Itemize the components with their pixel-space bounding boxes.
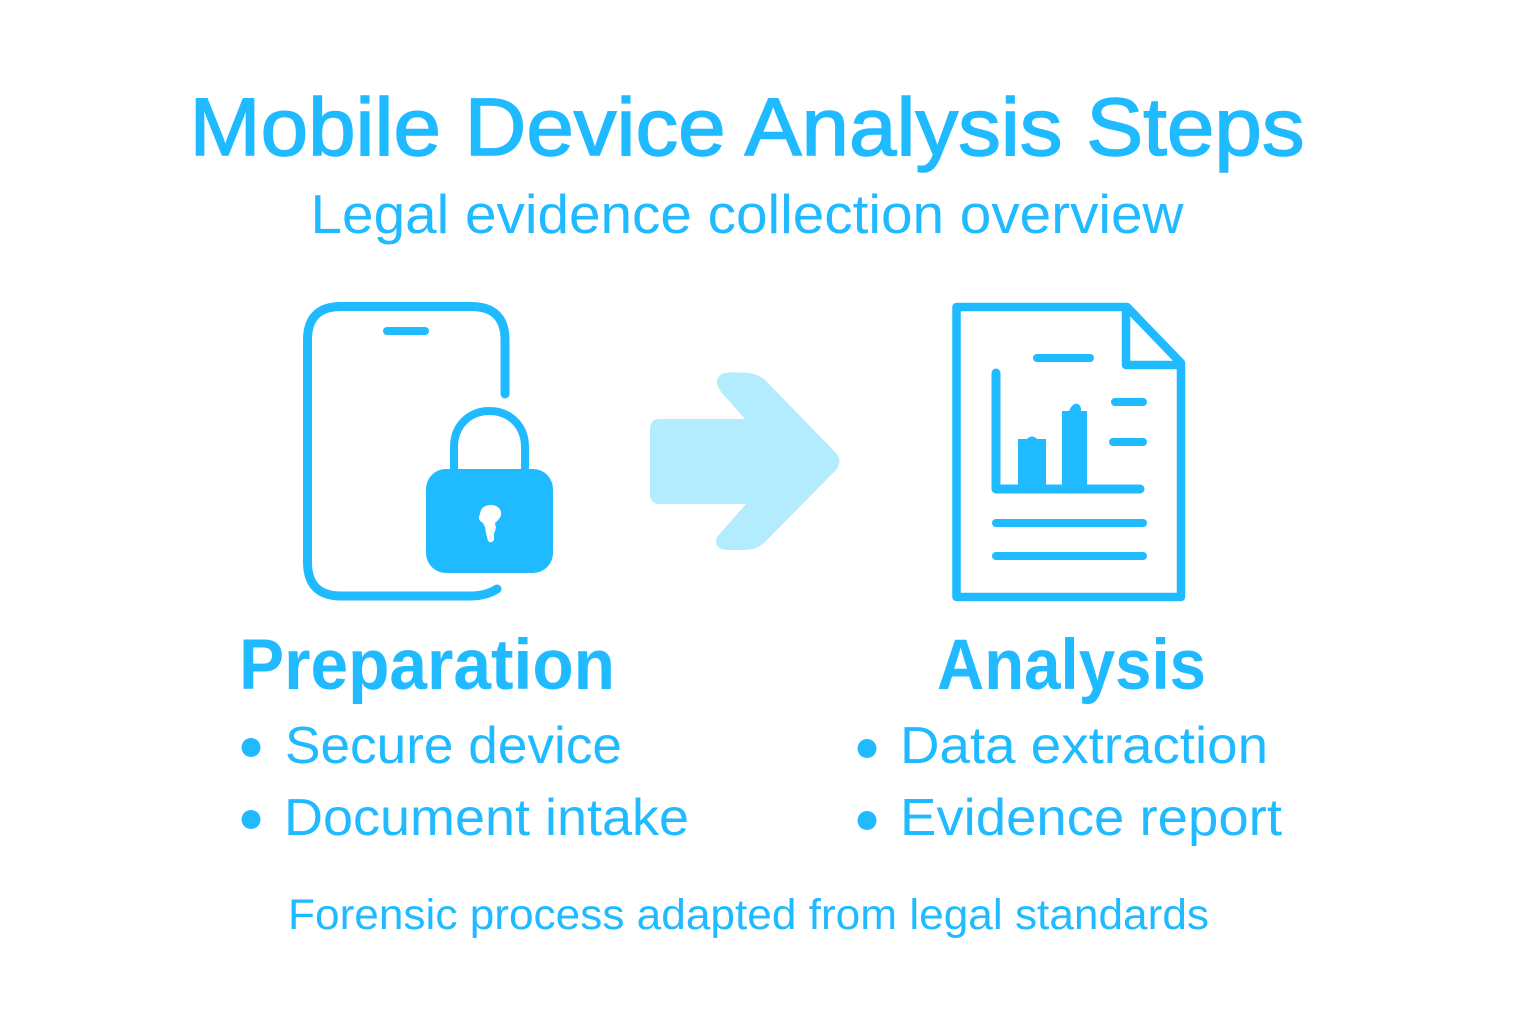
heading: Preparation: Preparation (239, 626, 615, 705)
list: preparation steps (242, 717, 689, 847)
list: preparation steps: Secure device (285, 717, 622, 775)
subtitle: Legal evidence collection overview (310, 183, 1184, 245)
footer note: Forensic process adapted from legal standards (288, 891, 1209, 939)
arrow (650, 372, 840, 550)
title: Mobile Device Analysis Steps (190, 82, 1304, 173)
heading: Analysis: Analysis (937, 626, 1206, 705)
icon: document with bar chart (956, 307, 1182, 597)
icon: phone with padlock (308, 306, 553, 596)
list: analysis steps: Evidence report (900, 789, 1283, 847)
list: analysis steps (858, 717, 1283, 847)
list: preparation steps: Document intake (284, 789, 689, 847)
list: analysis steps: Data extraction (900, 717, 1268, 775)
